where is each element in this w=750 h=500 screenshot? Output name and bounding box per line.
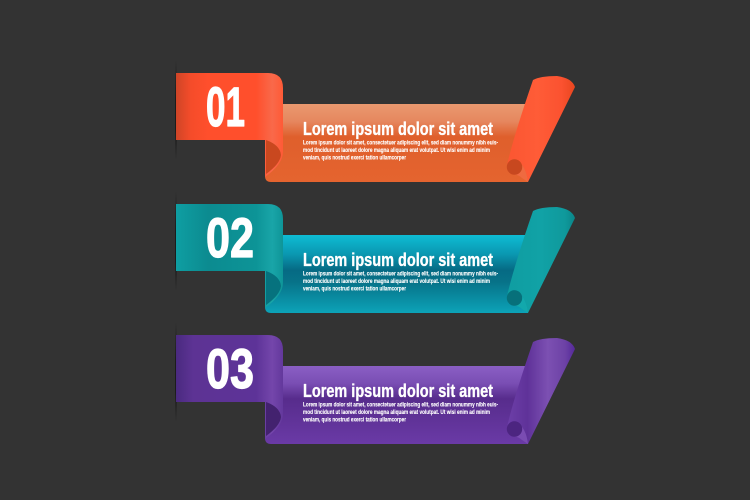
number tab 1	[176, 73, 283, 177]
curl spiral 1	[507, 159, 522, 175]
page curl 1	[507, 76, 575, 182]
fold 1	[266, 140, 281, 174]
number 02: 02	[206, 206, 254, 269]
body text 3: mod tincidunt ut laoreet dolore magna aliquam erat volutpat. Ut wisi enim ad minim	[303, 409, 490, 416]
heading 1: Lorem ipsum dolor sit amet	[303, 119, 493, 139]
banner body 2	[265, 235, 530, 313]
number tab 2	[176, 204, 283, 308]
body text 2	[303, 270, 498, 292]
fold 2	[266, 271, 281, 305]
page curl 2	[507, 207, 575, 313]
heading 2: Lorem ipsum dolor sit amet	[303, 250, 493, 270]
ribbon 2	[175, 191, 575, 313]
body text 3: veniam, quis nostrud exerci tation ullamcorper	[303, 416, 406, 424]
body text 1: mod tincidunt ut laoreet dolore magna aliquam erat volutpat. Ut wisi enim ad minim	[303, 147, 490, 154]
number 01: 01	[206, 75, 245, 138]
banner body 3	[265, 366, 530, 444]
ribbon 3	[175, 322, 575, 444]
body text 3	[303, 402, 498, 424]
body text 1: veniam, quis nostrud exerci tation ullamcorper	[303, 154, 406, 162]
curl spiral 2	[507, 290, 522, 306]
body text 2: mod tincidunt ut laoreet dolore magna aliquam erat volutpat. Ut wisi enim ad minim	[303, 278, 490, 285]
ribbon 1	[175, 60, 575, 182]
body text 1: Lorem ipsum dolor sit amet, consectetuer adipiscing elit, sed diam nonummy nibh euis-	[303, 140, 498, 146]
curl spiral 3	[507, 421, 522, 437]
page curl 3	[507, 338, 575, 444]
number 03: 03	[206, 337, 254, 400]
body text 1	[303, 140, 498, 162]
banner body 1	[265, 104, 530, 182]
number tab 3	[176, 335, 283, 439]
fold 3	[266, 402, 281, 436]
body text 2: veniam, quis nostrud exerci tation ullamcorper	[303, 286, 406, 292]
body text 3: Lorem ipsum dolor sit amet, consectetuer adipiscing elit, sed diam nonummy nibh euis-	[303, 402, 498, 408]
heading 3: Lorem ipsum dolor sit amet	[303, 381, 493, 401]
body text 2: Lorem ipsum dolor sit amet, consectetuer adipiscing elit, sed diam nonummy nibh euis-	[303, 270, 498, 278]
